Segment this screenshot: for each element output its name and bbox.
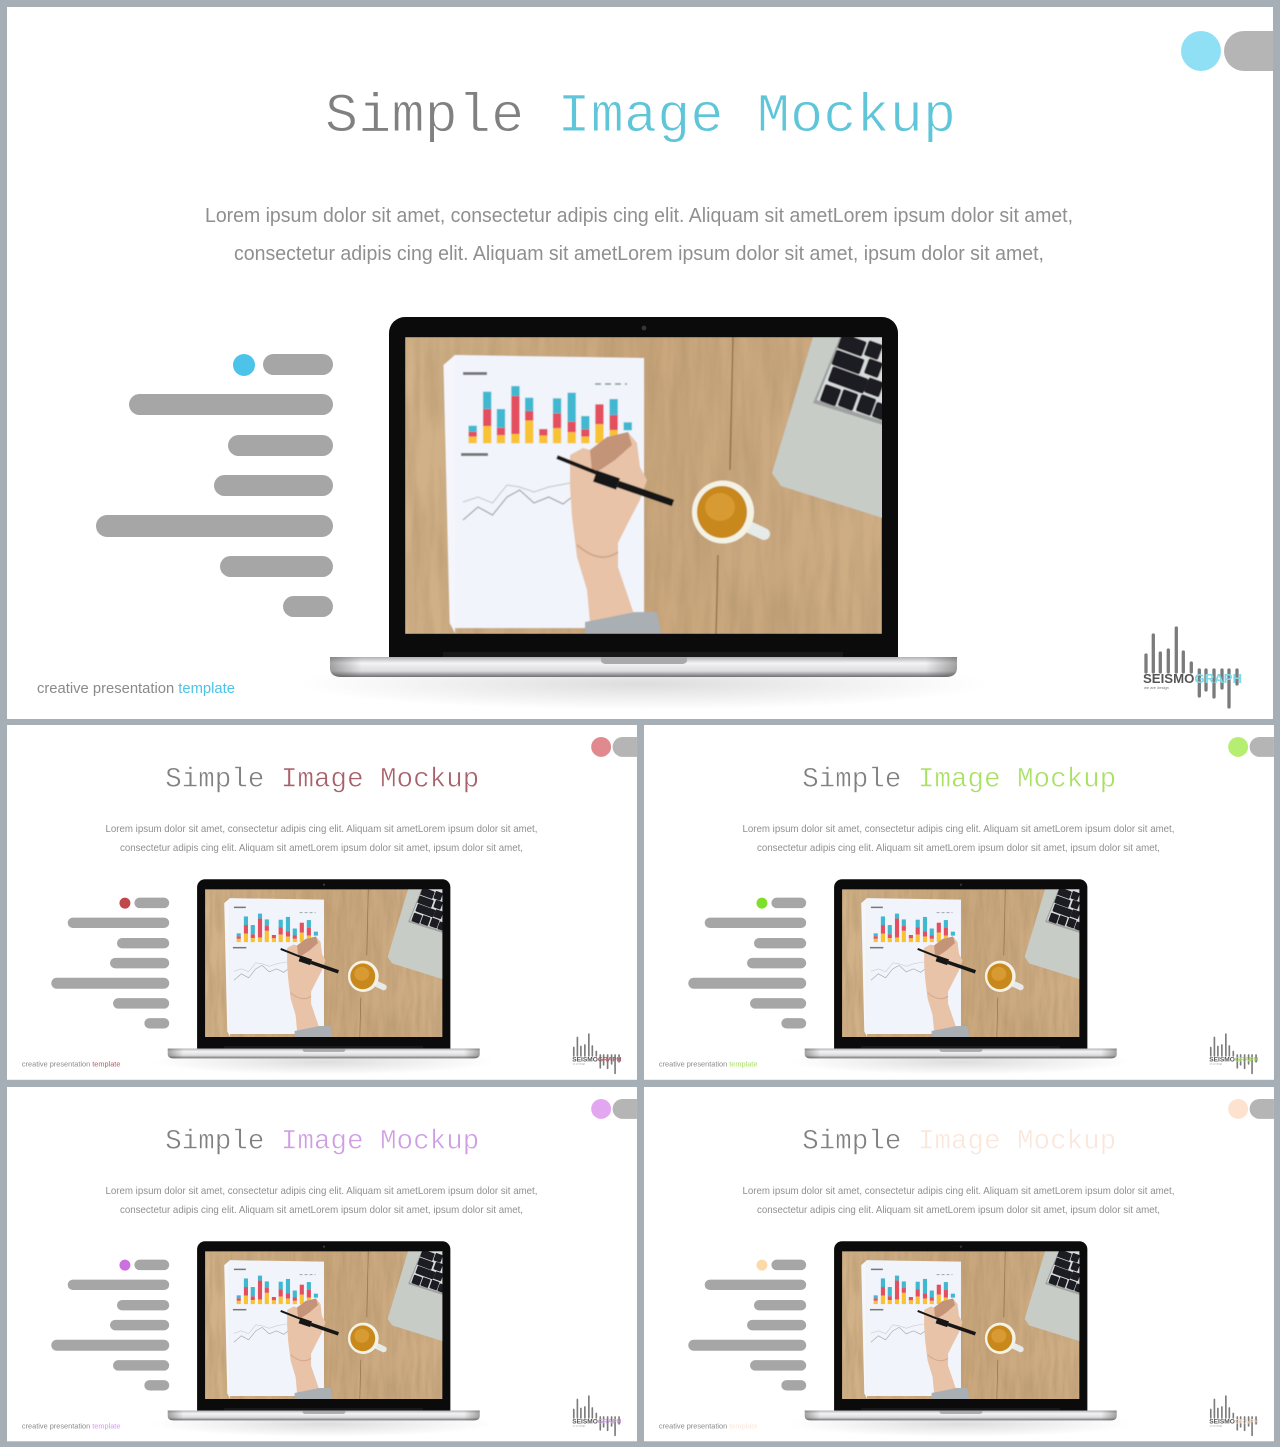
body text: Lorem ipsum dolor sit amet, consectetur adipis cing elit. Aliquam sit ametLorem ipsum dolor sit amet,	[106, 1186, 537, 1197]
body text	[106, 1186, 537, 1216]
panel: small slide peach	[644, 1087, 1274, 1441]
title: Simple Image Mockup	[802, 1127, 1116, 1158]
footer text: creative presentation template	[22, 1421, 120, 1430]
body text: consectetur adipis cing elit. Aliquam sit ametLorem ipsum dolor sit amet, ipsum dolor sit amet,	[120, 843, 523, 854]
logo	[1143, 628, 1242, 707]
logo: we are design	[573, 1062, 585, 1065]
bar list	[51, 1260, 169, 1391]
panel: small slide green	[644, 725, 1274, 1080]
logo: SEISMOGRAPH	[1209, 1056, 1259, 1063]
body text: Lorem ipsum dolor sit amet, consectetur adipis cing elit. Aliquam sit ametLorem ipsum dolor sit amet,	[743, 1186, 1174, 1197]
bar list	[688, 1260, 806, 1391]
footer text: creative presentation template	[22, 1059, 120, 1068]
body text: consectetur adipis cing elit. Aliquam sit ametLorem ipsum dolor sit amet, ipsum dolor sit amet,	[757, 1205, 1160, 1216]
body text: consectetur adipis cing elit. Aliquam sit ametLorem ipsum dolor sit amet, ipsum dolor sit amet,	[120, 1205, 523, 1216]
panel: small slide red	[7, 725, 637, 1080]
body text: Lorem ipsum dolor sit amet, consectetur adipis cing elit. Aliquam sit ametLorem ipsum dolor sit amet,	[106, 824, 537, 835]
logo: we are design	[573, 1424, 585, 1427]
title: Simple Image Mockup	[165, 1127, 479, 1158]
logo: we are design	[1210, 1424, 1222, 1427]
panel: small slide purple	[7, 1087, 637, 1441]
bar list	[688, 898, 806, 1029]
icon: top corner dot and tab	[591, 737, 637, 757]
logo: SEISMOGRAPH	[572, 1418, 622, 1425]
body text: Lorem ipsum dolor sit amet, consectetur adipis cing elit. Aliquam sit ametLorem ipsum dolor sit amet,	[205, 204, 1073, 227]
icon: top corner dot and tab	[1181, 31, 1273, 71]
bar list	[96, 354, 333, 617]
logo: SEISMOGRAPH	[1143, 671, 1242, 686]
title: Simple Image Mockup	[165, 765, 479, 796]
logo: SEISMOGRAPH	[1209, 1418, 1259, 1425]
icon: top corner dot and tab	[1228, 1099, 1274, 1119]
laptop image mockup	[152, 879, 495, 1075]
logo: we are design	[1210, 1062, 1222, 1065]
icon: top corner dot and tab	[1228, 737, 1274, 757]
body text	[743, 1186, 1174, 1216]
logo	[1209, 1034, 1259, 1073]
body text	[106, 824, 537, 854]
logo	[572, 1034, 622, 1073]
body text	[205, 204, 1073, 265]
laptop image mockup	[152, 1241, 495, 1437]
logo	[572, 1396, 622, 1435]
logo	[1209, 1396, 1259, 1435]
body text: consectetur adipis cing elit. Aliquam sit ametLorem ipsum dolor sit amet, ipsum dolor sit amet,	[234, 242, 1044, 265]
laptop image mockup	[789, 1241, 1132, 1437]
laptop image mockup	[298, 317, 988, 710]
logo: we are design	[1144, 685, 1169, 690]
body text	[743, 824, 1174, 854]
footer text: creative presentation template	[37, 680, 235, 697]
footer text: creative presentation template	[659, 1421, 757, 1430]
body text: consectetur adipis cing elit. Aliquam sit ametLorem ipsum dolor sit amet, ipsum dolor sit amet,	[757, 843, 1160, 854]
bar list	[51, 898, 169, 1029]
title: Simple Image Mockup	[325, 85, 956, 148]
body text: Lorem ipsum dolor sit amet, consectetur adipis cing elit. Aliquam sit ametLorem ipsum dolor sit amet,	[743, 824, 1174, 835]
footer text: creative presentation template	[659, 1059, 757, 1068]
logo: SEISMOGRAPH	[572, 1056, 622, 1063]
icon: top corner dot and tab	[591, 1099, 637, 1119]
laptop image mockup	[789, 879, 1132, 1075]
panel: large slide blue	[7, 7, 1273, 719]
title: Simple Image Mockup	[802, 765, 1116, 796]
